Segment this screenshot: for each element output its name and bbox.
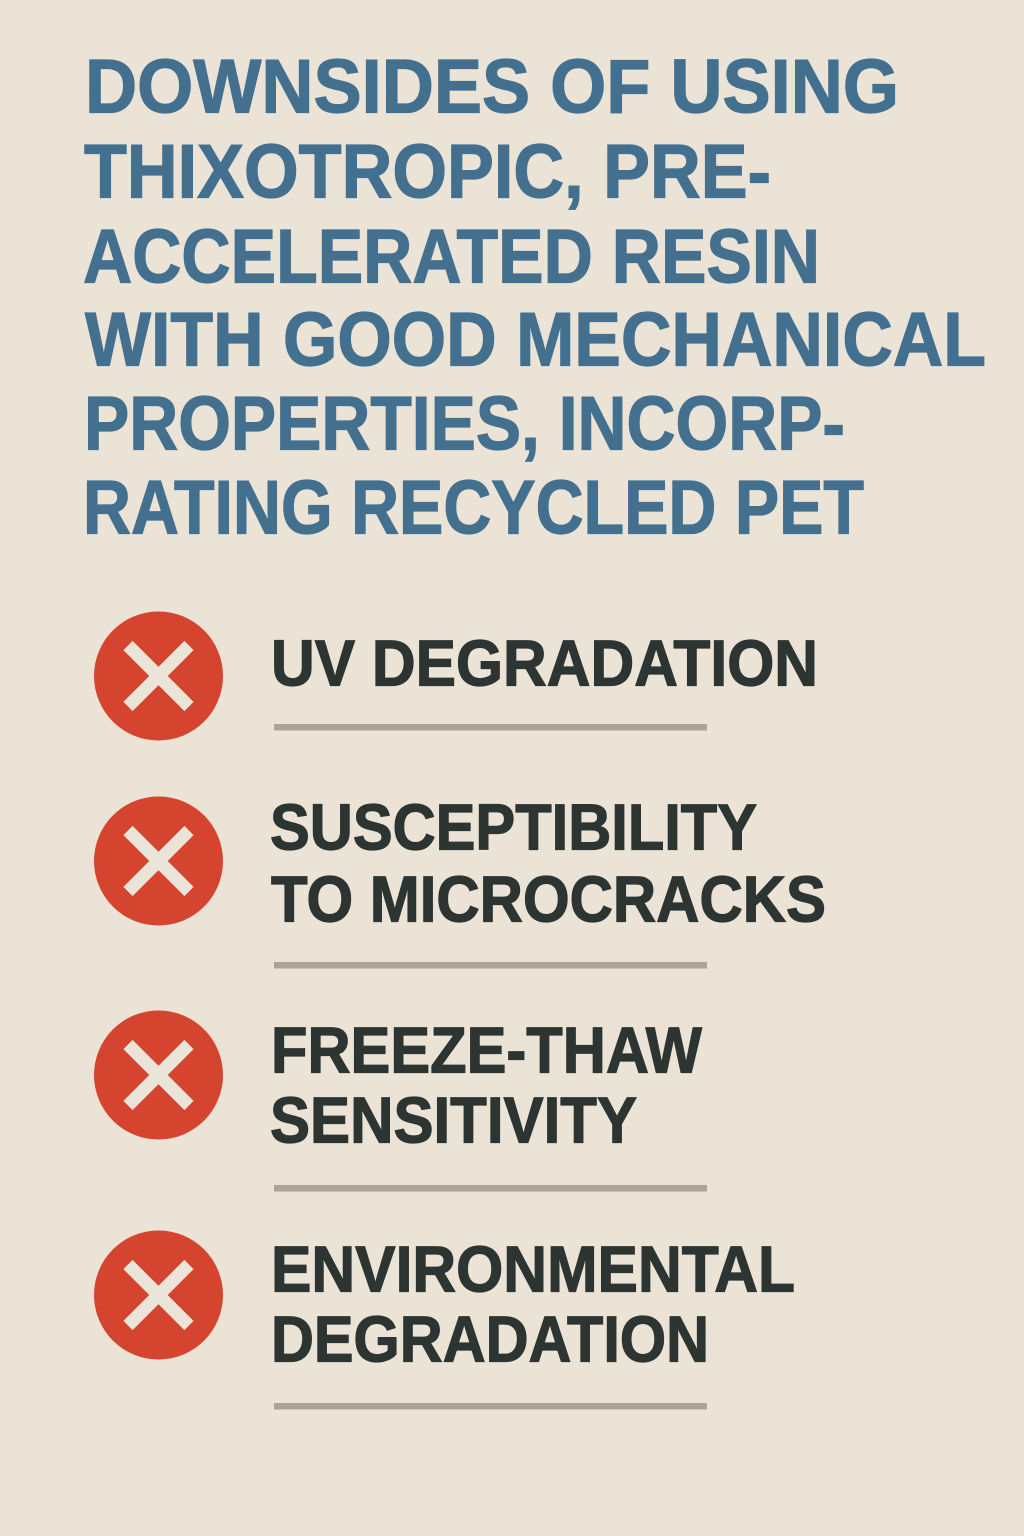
- icon: red cross circle: [94, 1230, 223, 1360]
- panel: freeze-thaw sensitivity: SENSITIVITY: [270, 1084, 637, 1156]
- title: PROPERTIES, INCORP-: [84, 382, 845, 466]
- title: [83, 44, 986, 550]
- label: environmental degradation: ENVIRONMENTAL: [271, 1232, 795, 1306]
- icon: red cross circle: [94, 796, 223, 926]
- label: susceptibility to microcracks: SUSCEPTIBILITY: [270, 790, 757, 864]
- title: THIXOTROPIC, PRE-: [84, 130, 771, 214]
- title: RATING RECYCLED PET: [83, 466, 864, 550]
- panel: susceptibility to microcracks: TO MICROCRACKS: [271, 862, 826, 936]
- icon: red cross circle: [94, 1010, 223, 1140]
- panel: environmental degradation: DEGRADATION: [271, 1302, 709, 1376]
- title: DOWNSIDES OF USING: [85, 44, 899, 130]
- icon: red cross circle: [94, 612, 223, 740]
- panel: UV degradation: [94, 612, 818, 740]
- title: ACCELERATED RESIN: [83, 214, 820, 300]
- panel: susceptibility to microcracks: [94, 790, 826, 968]
- panel: freeze-thaw sensitivity: [94, 1010, 707, 1192]
- label: UV degradation: UV DEGRADATION: [271, 626, 818, 700]
- label: freeze-thaw sensitivity: FREEZE-THAW: [271, 1014, 703, 1086]
- panel: environmental degradation: [94, 1230, 795, 1410]
